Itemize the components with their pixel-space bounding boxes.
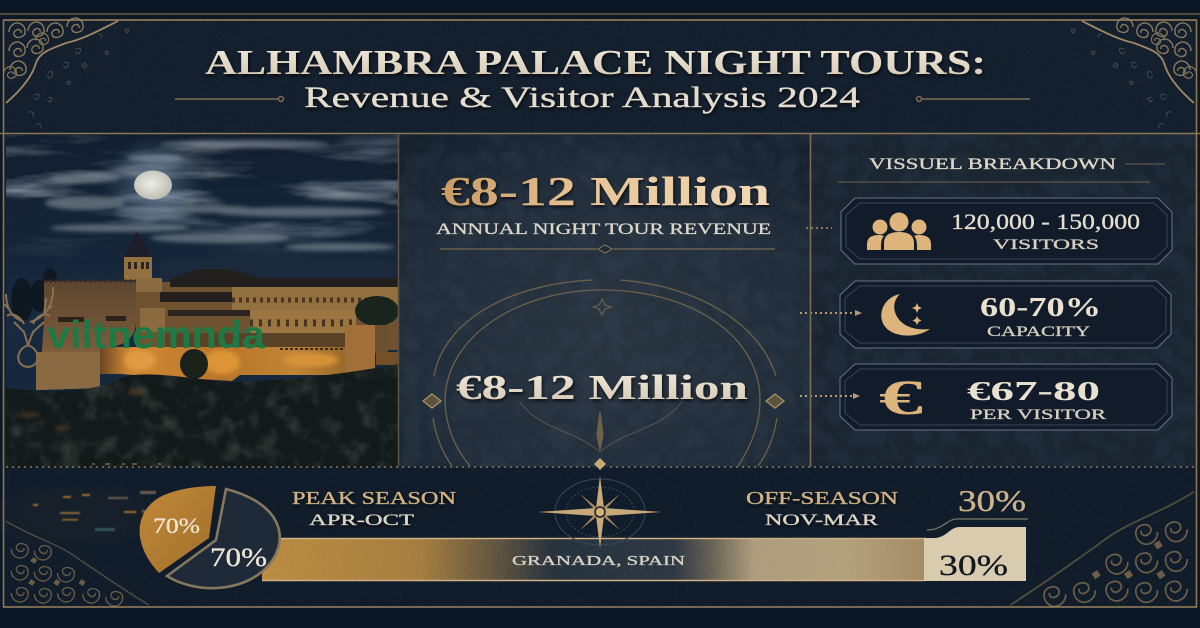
headline label: ANNUAL NIGHT TOUR REVENUE	[436, 221, 771, 238]
ornament: top-left corner	[4, 18, 129, 128]
pie chart	[140, 486, 280, 588]
city lights bottom-left	[0, 483, 160, 547]
right heading	[838, 156, 1165, 182]
panel: right column background	[811, 134, 1196, 467]
medallion diamonds	[423, 394, 784, 408]
label: off-season	[746, 488, 898, 529]
pie: dark slice	[167, 489, 280, 588]
trees behind palace	[11, 268, 57, 322]
pie: dark slice: 70%	[210, 543, 267, 572]
card: visitors: 120,000 - 150,000	[951, 209, 1140, 234]
illuminated wall	[100, 347, 345, 381]
icon: deer head	[4, 287, 53, 367]
pie: gold slice: 70%	[153, 513, 200, 538]
card: capacity	[840, 281, 1171, 348]
label: off-season: NOV-MAR	[765, 512, 878, 529]
label: off-season share	[927, 483, 1028, 530]
title: ALHAMBRA PALACE NIGHT TOURS:	[205, 43, 986, 82]
dark tree right	[355, 296, 399, 326]
card: capacity: 60-70%	[980, 292, 1101, 322]
label: location: GRANADA, SPAIN	[512, 554, 685, 569]
icon: crescent and stars	[881, 294, 930, 336]
clouds	[6, 135, 398, 260]
pie: gold slice	[140, 486, 216, 573]
arrow: revenue to per visitor	[800, 393, 860, 399]
card: per visitor: €67-80	[967, 376, 1100, 406]
icon: compass rose	[538, 476, 661, 548]
card: visitors	[841, 198, 1172, 264]
ornament: bottom-right corner	[1010, 492, 1194, 606]
label: peak season: PEAK SEASON	[292, 488, 456, 508]
card: capacity: CAPACITY	[987, 324, 1090, 340]
card: visitors: VISITORS	[993, 237, 1099, 253]
right heading: VISSUEL BREAKDOWN	[869, 156, 1116, 173]
fortress tower left	[36, 281, 136, 390]
arrow: revenue to visitors	[806, 227, 832, 229]
card: per visitor	[840, 364, 1172, 430]
icon: euro: €	[879, 369, 923, 425]
circular medallion	[423, 280, 784, 466]
subtitle: Revenue & Visitor Analysis 2024	[304, 81, 860, 114]
mountains	[160, 256, 398, 282]
panel: centre revenue background	[399, 134, 810, 467]
bar: peak vs off-season	[262, 527, 1026, 582]
headline metric: €8-12 Million	[441, 168, 770, 214]
off-season light segment	[924, 527, 1026, 581]
ornament: top-right corner	[1071, 18, 1196, 128]
label: off-season share: 30%	[958, 483, 1026, 518]
subtitle flourishes	[175, 96, 1030, 102]
icon: people	[867, 212, 931, 250]
label: peak season: APR-OCT	[309, 512, 414, 529]
bell tower	[124, 232, 162, 292]
label: peak season	[292, 488, 456, 529]
wordmark: viltnemnda	[47, 314, 265, 357]
photo: Alhambra at night	[6, 135, 399, 467]
small lights	[92, 463, 161, 465]
right fortress tower	[345, 325, 398, 375]
forest foreground	[6, 349, 398, 467]
card: per visitor: PER VISITOR	[970, 407, 1106, 423]
secondary metric: €8-12 Million	[456, 368, 748, 407]
watermark: deer logo and wordmark	[4, 287, 265, 367]
label: off-season: OFF-SEASON	[746, 488, 898, 508]
diamond divider	[440, 245, 775, 253]
ornament: bottom-left corner	[6, 521, 149, 606]
palace main building	[136, 269, 398, 350]
arrow: revenue to capacity	[800, 310, 862, 316]
label: off-season bar value: 30%	[939, 549, 1008, 582]
moon	[110, 141, 196, 224]
panel: bottom seasonal band	[4, 468, 1196, 606]
